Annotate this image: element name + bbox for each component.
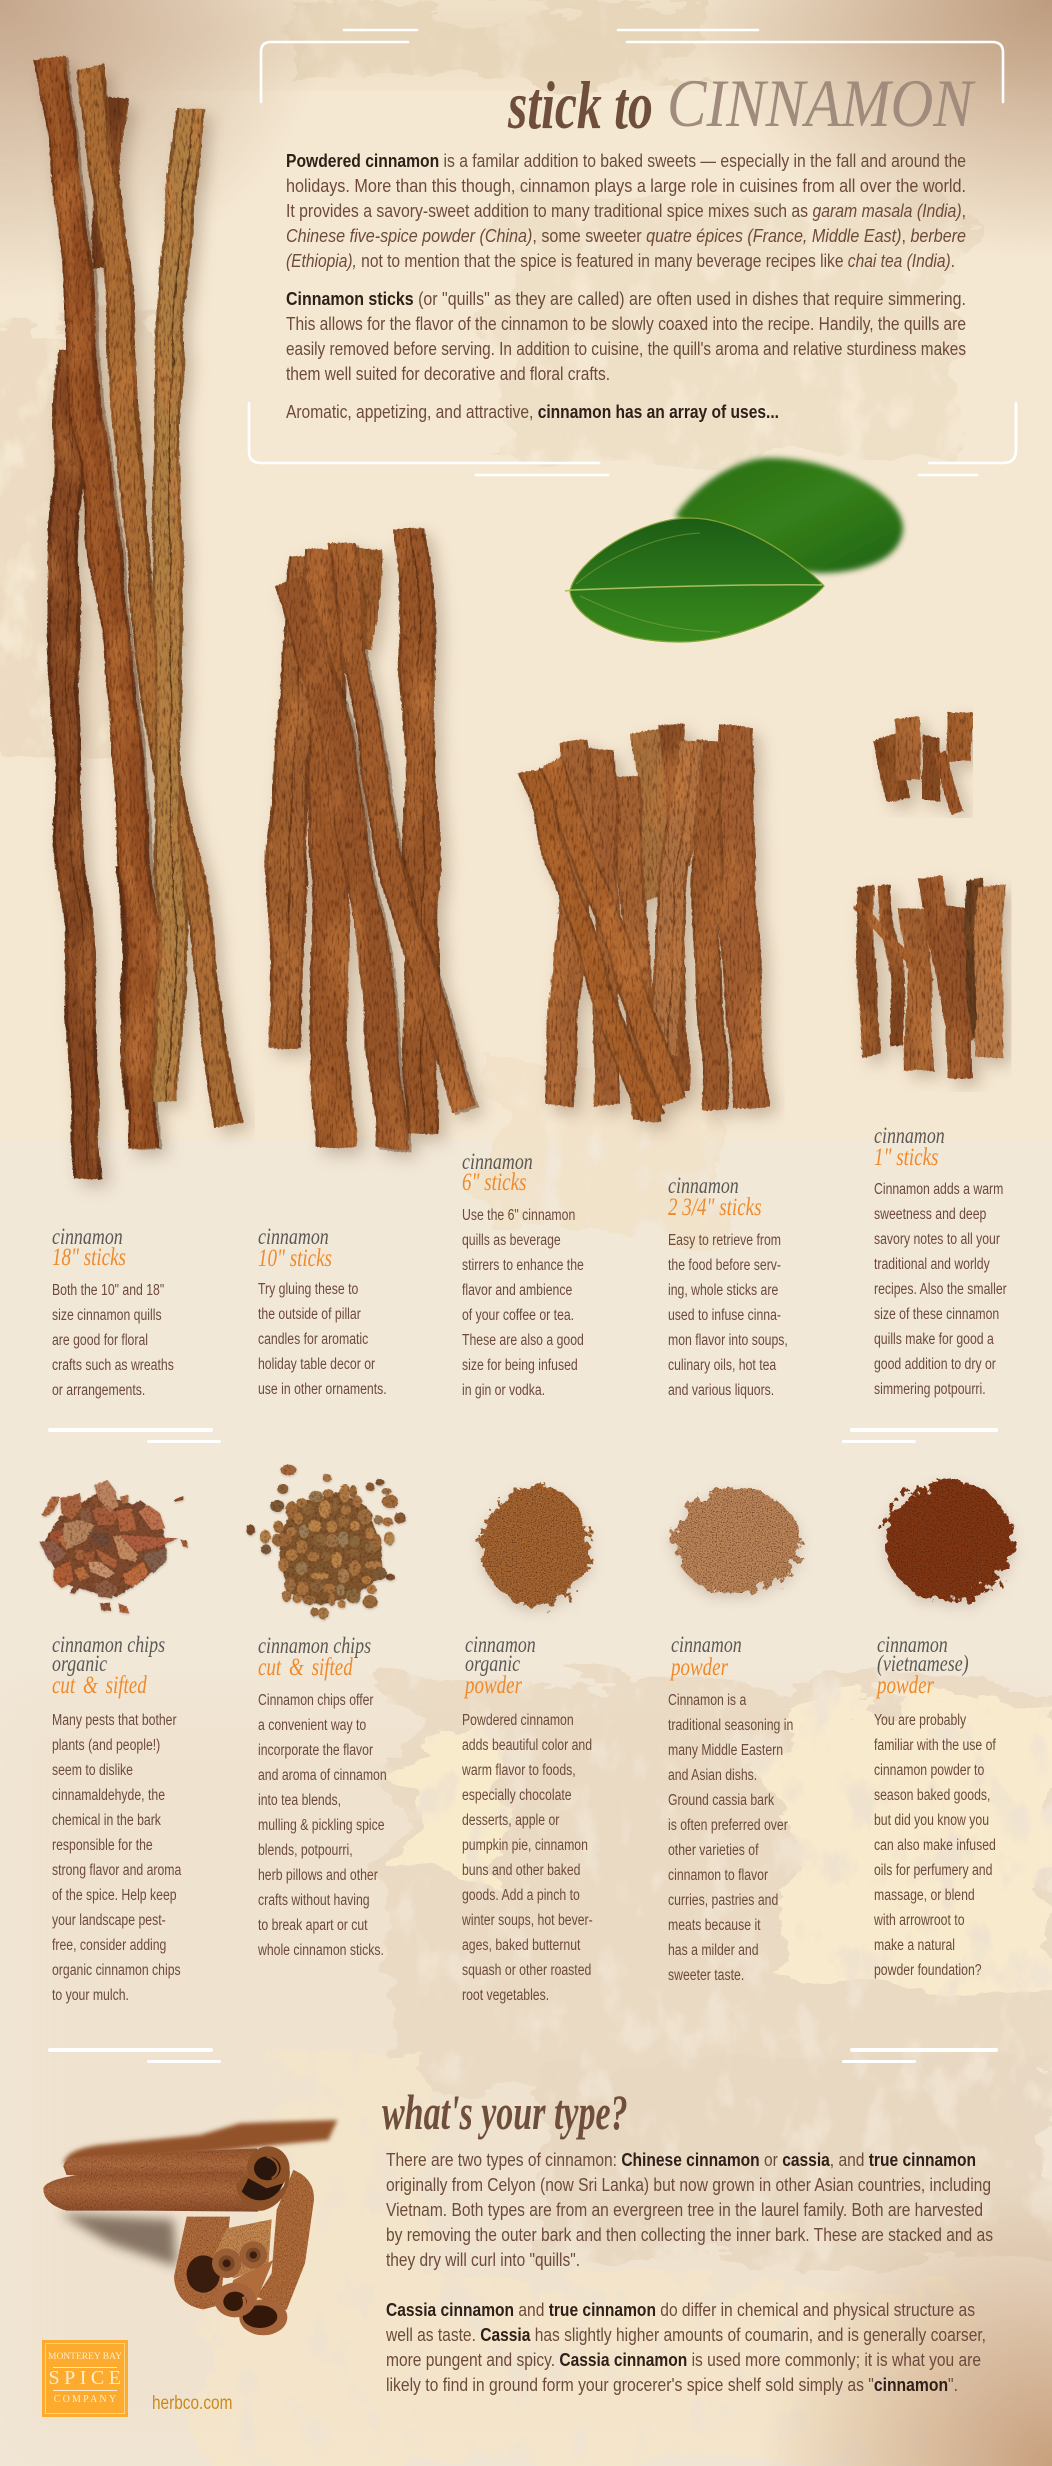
panel: powder: meats because it [668, 1916, 761, 1934]
logo: Monterey Bay Spice Company: COMPANY [54, 2394, 118, 2405]
panel: organic powder: ages, baked butternut [462, 1936, 580, 1954]
panel: 6 inch sticks: flavor and ambience [462, 1282, 572, 1298]
panel: 18 inch sticks: 18" sticks [52, 1244, 126, 1271]
panel: organic powder: adds beautiful color and [462, 1736, 592, 1754]
panel: 1 inch sticks: size of these cinnamon [874, 1306, 999, 1322]
panel: chips organic: to your mulch. [52, 1986, 129, 2004]
panel: powder: curries, pastries and [668, 1892, 778, 1908]
panel: organic powder: organic [465, 1651, 520, 1676]
text: types of cinnamon: they dry will curl into "quills". [386, 2250, 580, 2270]
panel: chips organic: plants (and people!) [52, 1736, 160, 1754]
logo: Monterey Bay Spice Company [42, 2340, 128, 2417]
panel: 18 inch sticks: cinnamon [52, 1224, 123, 1249]
panel: vietnamese powder: You are probably [874, 1712, 966, 1728]
panel: 6 inch sticks: quills as beverage [462, 1232, 561, 1248]
panel: 2 3/4 inch sticks: cinnamon [668, 1173, 739, 1198]
panel: chips organic: your landscape pest- [52, 1912, 166, 1928]
panel: 2 3/4 inch sticks: Easy to retrieve from [668, 1232, 781, 1248]
panel: 18 inch sticks: crafts such as wreaths [52, 1356, 174, 1374]
panel: 2 3/4 inch sticks: 2 3/4" sticks [668, 1194, 761, 1221]
panel: chips cut and sifted: whole cinnamon sticks. [258, 1942, 384, 1958]
panel: organic powder: goods. Add a pinch to [462, 1886, 580, 1904]
panel: vietnamese powder: (vietnamese) [877, 1651, 969, 1676]
panel: 10 inch sticks: Try gluing these to [258, 1280, 358, 1298]
panel: 10 inch sticks: candles for aromatic [258, 1330, 368, 1348]
panel: 18 inch sticks: size cinnamon quills [52, 1306, 162, 1324]
panel: 6 inch sticks [462, 1149, 584, 1398]
panel: 6 inch sticks: These are also a good [462, 1332, 584, 1348]
panel: chips cut and sifted [258, 1633, 387, 1958]
panel: organic powder: buns and other baked [462, 1862, 580, 1878]
panel: chips organic: cut & sifted [52, 1672, 147, 1699]
panel: organic powder: pumpkin pie, cinnamon [462, 1836, 588, 1854]
intro text: Chinese five-spice powder (China), some sweeter quatre épices (France, Middle East), berbere [286, 226, 966, 246]
text: types of cinnamon: more pungent and spicy. Cassia cinnamon is used more commonly; it is what you are [386, 2350, 981, 2370]
intro text: (Ethiopia), not to mention that the spice is featured in many beverage recipes like chai tea (India). [286, 251, 955, 271]
panel: 1 inch sticks: simmering potpourri. [874, 1380, 986, 1398]
panel: chips cut and sifted: herb pillows and other [258, 1866, 378, 1884]
panel: chips cut and sifted: a convenient way to [258, 1716, 366, 1734]
panel: powder: Cinnamon is a [668, 1692, 746, 1708]
panel: vietnamese powder: oils for perfumery and [874, 1862, 992, 1878]
divider: first [48, 1428, 998, 1443]
panel: chips organic: responsible for the [52, 1836, 153, 1854]
panel: chips organic [52, 1632, 182, 2004]
panel: chips organic: chemical in the bark [52, 1812, 161, 1828]
sticks: 1 inch top group [884, 711, 961, 810]
panel: 1 inch sticks: 1" sticks [874, 1144, 938, 1171]
panel: 10 inch sticks: the outside of pillar [258, 1306, 361, 1322]
panel: powder: sweeter taste. [668, 1966, 744, 1984]
panel: 10 inch sticks: holiday table decor or [258, 1356, 375, 1372]
text: types of cinnamon: well as taste. Cassia has slightly higher amounts of coumarin, and is generally coarser, [385, 2325, 986, 2345]
right vertical quills [257, 2170, 314, 2310]
panel: vietnamese powder: can also make infused [874, 1836, 996, 1854]
logo: Monterey Bay Spice Company: SPICE [49, 2367, 125, 2389]
text: types of cinnamon [385, 2150, 993, 2395]
panel: chips cut and sifted: crafts without having [258, 1892, 370, 1908]
panel: vietnamese powder: familiar with the use of [874, 1736, 996, 1754]
bottom quills [214, 2260, 287, 2335]
sticks: 18 inch [42, 57, 227, 1178]
panel: organic powder: cinnamon [465, 1632, 536, 1657]
panel: 1 inch sticks: good addition to dry or [874, 1356, 996, 1372]
panel: 2 3/4 inch sticks: ing, whole sticks are [668, 1282, 778, 1298]
panel: 10 inch sticks: cinnamon [258, 1224, 329, 1249]
panel: powder: many Middle Eastern [668, 1742, 783, 1758]
panel: vietnamese powder: massage, or blend [874, 1886, 975, 1904]
panel: 10 inch sticks: use in other ornaments. [258, 1380, 387, 1398]
panel: 6 inch sticks: of your coffee or tea. [462, 1306, 574, 1324]
panel: 1 inch sticks: recipes. Also the smaller [874, 1280, 1007, 1298]
panel: chips cut and sifted: into tea blends, [258, 1792, 341, 1808]
panel: powder: cinnamon to flavor [668, 1866, 768, 1884]
divider: second [48, 2048, 998, 2063]
lower middle quill [212, 2219, 272, 2278]
panel: chips cut and sifted: to break apart or cut [258, 1916, 368, 1934]
powder organic [482, 1486, 590, 1606]
panel: 2 3/4 inch sticks: culinary oils, hot tea [668, 1356, 776, 1374]
panel: 6 inch sticks: stirrers to enhance the [462, 1256, 584, 1274]
panel: organic powder [462, 1632, 593, 2004]
panel: chips cut and sifted: incorporate the flavor [258, 1742, 373, 1758]
intro text: This allows for the flavor of the cinnamon to be slowly coaxed into the recipe. Handily, the quills are [286, 314, 966, 334]
panel: vietnamese powder: powder foundation? [874, 1962, 982, 1978]
blurred back quill [63, 2120, 337, 2163]
panel: 6 inch sticks: 6" sticks [462, 1169, 526, 1196]
leaves [565, 458, 903, 642]
title: CINNAMON [667, 65, 973, 141]
panel: vietnamese powder: cinnamon [877, 1632, 948, 1657]
panel: organic powder: powder [465, 1672, 522, 1699]
panel: chips cut and sifted: Cinnamon chips offer [258, 1692, 373, 1708]
panel: 10 inch sticks: 10" sticks [258, 1245, 332, 1272]
chips organic [39, 1480, 188, 1613]
panel: chips cut and sifted: and aroma of cinnamon [258, 1766, 387, 1784]
panel: vietnamese powder: cinnamon powder to [874, 1762, 984, 1778]
panel: chips organic: seem to dislike [52, 1762, 133, 1778]
intro text: It provides a savory-sweet addition to many traditional spice mixes such as garam masala (India), [286, 201, 966, 221]
panel: 6 inch sticks: in gin or vodka. [462, 1382, 545, 1398]
title [508, 65, 976, 143]
panel: 2 3/4 inch sticks [668, 1173, 788, 1398]
panel: vietnamese powder [874, 1632, 996, 1978]
panel: 2 3/4 inch sticks: and various liquors. [668, 1382, 774, 1398]
panel: 18 inch sticks [52, 1224, 174, 1398]
panel: 10 inch sticks [258, 1224, 387, 1398]
intro text: holidays. More than this though, cinnamon plays a large role in cuisines from all over the world. [286, 176, 966, 196]
text: types of cinnamon: Cassia cinnamon and true cinnamon do differ in chemical and physical structure as [386, 2300, 975, 2320]
panel: chips cut and sifted: blends, potpourri, [258, 1842, 353, 1858]
powder [675, 1488, 799, 1596]
panel: powder [668, 1632, 793, 1984]
panel: chips cut and sifted: cinnamon chips [258, 1633, 371, 1658]
title: stick to [508, 67, 653, 143]
panel: powder: and Asian dishs. [668, 1766, 757, 1784]
panel: chips organic: strong flavor and aroma [52, 1862, 181, 1878]
photo: stacked quills [43, 2120, 337, 2335]
panel: powder: Ground cassia bark [668, 1792, 774, 1808]
link: herbco.com: herbco.com [152, 2393, 232, 2414]
panel: 1 inch sticks [874, 1123, 1007, 1398]
powder vietnamese [885, 1481, 1013, 1601]
panel: powder: traditional seasoning in [668, 1716, 793, 1734]
panel: vietnamese powder: but did you know you [874, 1812, 989, 1828]
intro text: Cinnamon sticks (or "quills" as they are called) are often used in dishes that require simmering. [286, 289, 966, 309]
panel: vietnamese powder: powder [877, 1672, 934, 1699]
panel: organic powder: especially chocolate [462, 1786, 572, 1804]
panel: organic powder: warm flavor to foods, [462, 1762, 576, 1778]
panel: chips organic: cinnamaldehyde, the [52, 1786, 165, 1804]
panel: 6 inch sticks: size for being infused [462, 1356, 578, 1374]
panel: 1 inch sticks: sweetness and deep [874, 1206, 986, 1222]
intro text: Aromatic, appetizing, and attractive, cinnamon has an array of uses... [286, 402, 779, 422]
logo: Monterey Bay Spice Company: MONTEREY BAY [48, 2352, 122, 2362]
panel: powder: other varieties of [668, 1842, 759, 1858]
panel: powder: is often preferred over [668, 1816, 788, 1834]
lower left quill [174, 2217, 230, 2309]
panel: vietnamese powder: make a natural [874, 1936, 955, 1954]
panel: 18 inch sticks: Both the 10" and 18" [52, 1282, 164, 1298]
sticks: 10 inch [286, 528, 470, 1150]
panel: vietnamese powder: season baked goods, [874, 1786, 990, 1804]
quill shadow [60, 2213, 177, 2267]
panel: organic powder: winter soups, hot bever- [462, 1912, 593, 1928]
panel: 18 inch sticks: are good for floral [52, 1332, 148, 1348]
leaf: back blurred [675, 458, 903, 573]
panel: chips organic: of the spice. Help keep [52, 1886, 177, 1904]
panel: 18 inch sticks: or arrangements. [52, 1382, 145, 1398]
text: types of cinnamon: There are two types of cinnamon: Chinese cinnamon or cassia, and true cinnamon [386, 2150, 976, 2170]
panel: 2 3/4 inch sticks: the food before serv- [668, 1256, 781, 1274]
panel: organic powder: Powdered cinnamon [462, 1712, 574, 1728]
panel: powder: cinnamon [671, 1632, 742, 1657]
panel: organic powder: squash or other roasted [462, 1962, 591, 1978]
panel: 6 inch sticks: cinnamon [462, 1149, 533, 1174]
panel: chips organic: free, consider adding [52, 1936, 166, 1954]
sticks: 6 inch [530, 727, 751, 1120]
text: types of cinnamon: likely to find in ground form your grocerer's spice shelf sold simply as "cinnamon". [386, 2375, 958, 2395]
panel: powder: powder [671, 1654, 728, 1681]
sticks: 1 inch lower group [856, 876, 991, 1076]
panel: 2 3/4 inch sticks: mon flavor into soups, [668, 1332, 788, 1348]
panel: 2 3/4 inch sticks: used to infuse cinna- [668, 1306, 781, 1324]
panel: powder: has a milder and [668, 1942, 759, 1958]
panel: chips organic: cinnamon chips [52, 1632, 165, 1657]
panel: chips cut and sifted: cut & sifted [258, 1654, 353, 1681]
panel: 1 inch sticks: cinnamon [874, 1123, 945, 1148]
panel: chips organic: organic [52, 1651, 107, 1676]
panel: chips organic: organic cinnamon chips [52, 1962, 181, 1978]
intro text: them well suited for decorative and floral crafts. [286, 364, 610, 384]
panel: chips cut and sifted: mulling & pickling spice [258, 1816, 385, 1834]
panel: organic powder: root vegetables. [462, 1986, 549, 2004]
panel: organic powder: desserts, apple or [462, 1812, 559, 1828]
heading: what's your type: what's your type? [382, 2084, 628, 2140]
leaf: front [565, 518, 824, 642]
intro text: Powdered cinnamon is a familar addition to baked sweets — especially in the fall and around the [286, 151, 966, 171]
panel: 1 inch sticks: savory notes to all your [874, 1230, 1000, 1248]
panel: 1 inch sticks: Cinnamon adds a warm [874, 1180, 1003, 1198]
horizontal quills [43, 2146, 290, 2212]
panel: 1 inch sticks: quills make for good a [874, 1330, 994, 1348]
chips cut and sifted [246, 1465, 406, 1619]
panel: 6 inch sticks: Use the 6" cinnamon [462, 1206, 575, 1224]
panel: vietnamese powder: with arrowroot to [874, 1912, 965, 1928]
panel: 1 inch sticks: traditional and worldy [874, 1256, 990, 1272]
panel: chips organic: Many pests that bother [52, 1712, 177, 1728]
